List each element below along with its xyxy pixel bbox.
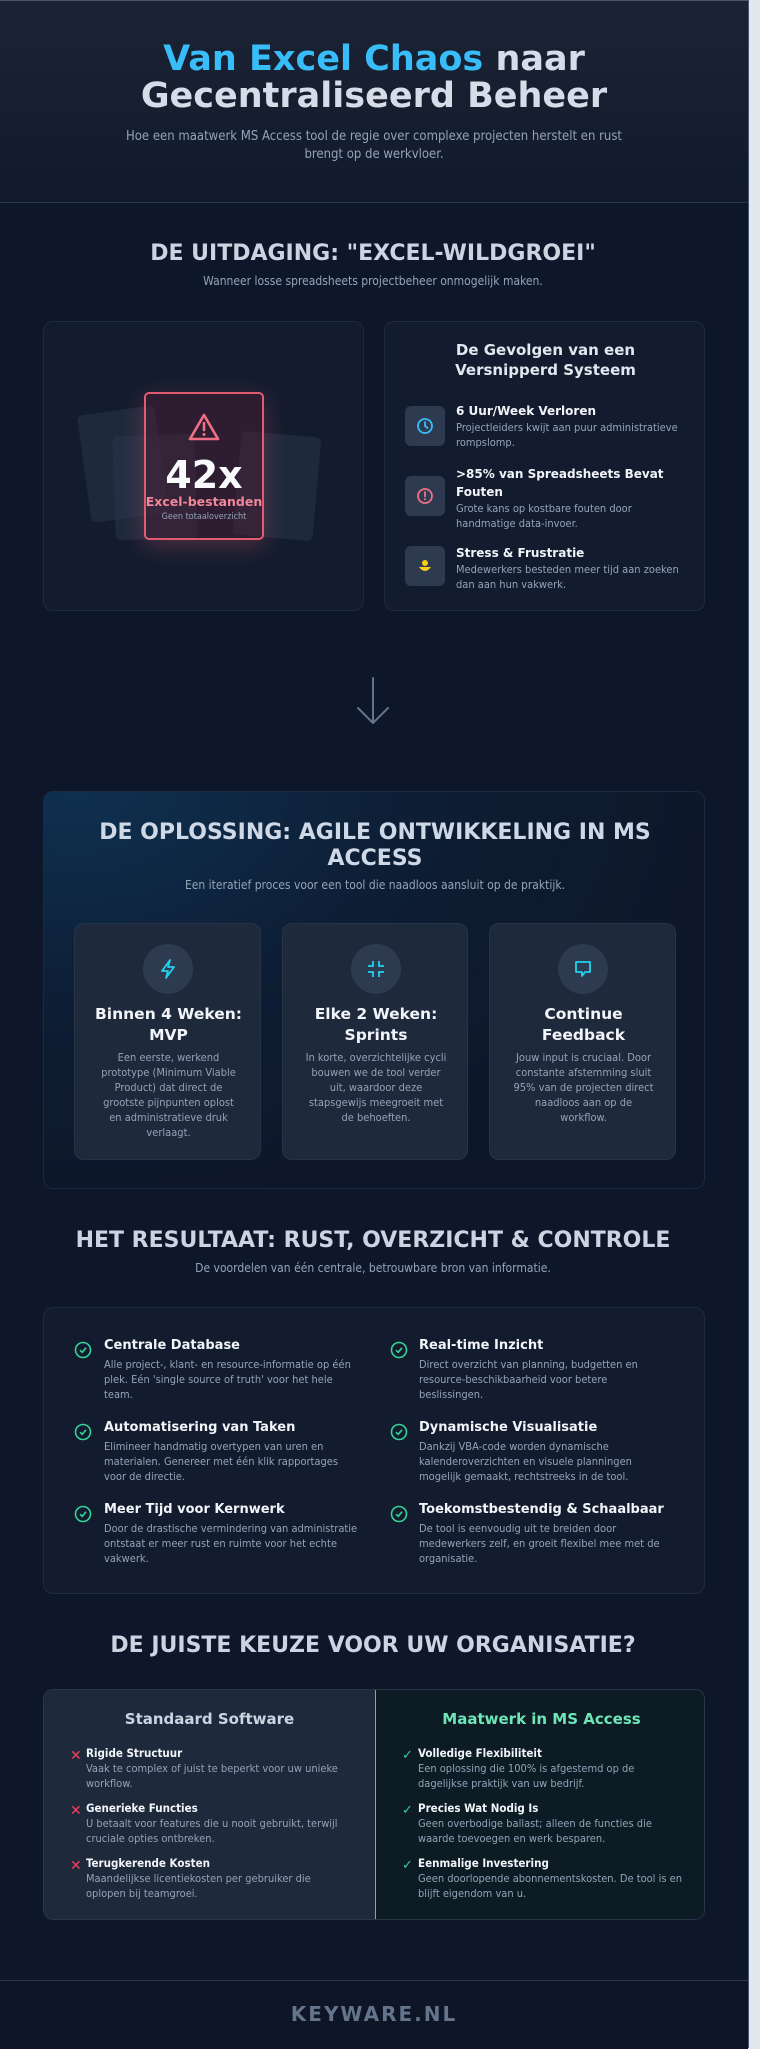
benefit: centrale database: Centrale Database xyxy=(104,1338,240,1353)
column: maatwerk xyxy=(375,1690,706,1921)
red alert box: Geen totaaloverzicht xyxy=(162,512,246,522)
heading: de uitdaging: DE UITDAGING: "EXCEL-WILDGROEI" xyxy=(150,241,596,266)
column: maatwerk: ✓ xyxy=(402,1748,413,1763)
column: maatwerk: Geen overbodige ballast; alleen de functies die waarde toevoegen en werk besparen. xyxy=(418,1817,652,1845)
benefit: meer tijd xyxy=(74,1502,357,1565)
item: stress: Medewerkers besteden meer tijd aan zoeken dan aan hun vakwerk. xyxy=(456,563,679,591)
column: standaard software: Rigide Structuur xyxy=(86,1746,182,1760)
item: fouten xyxy=(405,467,664,530)
column: maatwerk: ✓ xyxy=(402,1803,413,1818)
column: standaard software: ✕ xyxy=(70,1748,82,1764)
item: uren verloren: Projectleiders kwijt aan puur administratieve rompslomp. xyxy=(456,421,678,449)
subheading: oplossing: Een iteratief proces voor een tool die naadloos aansluit op de praktijk. xyxy=(185,878,565,892)
column: maatwerk: ✓ xyxy=(402,1858,413,1873)
pro: flexibiliteit xyxy=(402,1746,634,1790)
stat number: 42x xyxy=(165,453,243,497)
benefit: meer tijd: Door de drastische vermindering van administratie ontstaat er meer rust en ruimte voor het echte vakwerk. xyxy=(104,1522,357,1565)
footer xyxy=(0,1980,748,2049)
benefit: visualisatie xyxy=(390,1420,632,1483)
icon: chat xyxy=(558,944,608,994)
subheading: resultaat: De voordelen van één centrale, betrouwbare bron van informatie. xyxy=(195,1261,551,1275)
benefit: automatisering xyxy=(74,1420,338,1483)
ghost spreadsheets xyxy=(78,406,321,541)
icon: alert circle xyxy=(405,476,445,516)
column: maatwerk: Precies Wat Nodig Is xyxy=(418,1801,538,1815)
item: uren verloren xyxy=(405,404,678,449)
icon: sprint arrows xyxy=(351,944,401,994)
subheading: uitdaging: Wanneer losse spreadsheets projectbeheer onmogelijk maken. xyxy=(203,274,543,288)
column: maatwerk: Volledige Flexibiliteit xyxy=(418,1746,542,1760)
benefit: centrale database: Alle project-, klant- en resource-informatie op één plek. Eén 'single source of truth' voor het hele team. xyxy=(104,1358,351,1401)
column: maatwerk: Geen doorlopende abonnementskosten. De tool is en blijft eigendom van u. xyxy=(418,1872,682,1900)
card: mvp: Een eerste, werkend prototype (Minimum Viable Product) dat direct de grootste pijnpunten oplost en administratieve druk verlaagt. xyxy=(101,1051,236,1139)
card: sprints xyxy=(282,923,468,1160)
benefit: meer tijd: Meer Tijd voor Kernwerk xyxy=(104,1502,285,1517)
icon: stress xyxy=(405,546,445,586)
column: standaard software: U betaalt voor features die u nooit gebruikt, terwijl cruciale opties ontbreken. xyxy=(86,1817,338,1845)
arrow: down xyxy=(357,677,389,724)
column: standaard software: Generieke Functies xyxy=(86,1801,198,1815)
item: fouten: >85% van Spreadsheets Bevat Fouten xyxy=(456,467,664,499)
header xyxy=(0,1,748,203)
pro: precies xyxy=(402,1801,652,1845)
column: standaard software: ✕ xyxy=(70,1803,82,1819)
column: maatwerk: Eenmalige Investering xyxy=(418,1856,549,1870)
card: mvp: Binnen 4 Weken: xyxy=(95,1005,242,1023)
heading: oplossing: ACCESS xyxy=(327,846,423,871)
red alert box xyxy=(144,392,264,540)
column: standaard software: Standaard Software xyxy=(125,1710,294,1728)
column: maatwerk: Maatwerk in MS Access xyxy=(442,1710,641,1728)
icon: warning triangle xyxy=(188,414,220,440)
footer brand: KEYWARE.NL xyxy=(291,2002,457,2026)
card: feedback: Jouw input is cruciaal. Door constante afstemming sluit 95% van de projecten direct naadloos aan op de workflow. xyxy=(513,1051,654,1124)
benefit: real-time inzicht: Direct overzicht van planning, budgetten en resource-beschikbaarheid voor betere beslissingen. xyxy=(419,1358,638,1401)
title xyxy=(141,39,608,116)
benefit: toekomstbestendig: Toekomstbestendig & Schaalbaar xyxy=(419,1502,664,1517)
item: stress: Stress & Frustratie xyxy=(456,546,584,560)
heading: gevolgen xyxy=(455,341,636,379)
card: feedback: Feedback xyxy=(542,1026,625,1044)
column: standaard software: Maandelijkse licentiekosten per gebruiker die oplopen bij teamgroei. xyxy=(86,1872,311,1900)
heading: gevolgen: De Gevolgen van een xyxy=(456,341,635,359)
item: stress xyxy=(405,546,679,591)
benefit: toekomstbestendig xyxy=(390,1502,664,1565)
column: maatwerk: Een oplossing die 100% is afgestemd op de dagelijkse praktijk van uw bedrijf. xyxy=(418,1762,634,1790)
icon: lightning xyxy=(143,944,193,994)
benefit: visualisatie: Dynamische Visualisatie xyxy=(419,1420,597,1435)
panel: voordelen xyxy=(43,1307,705,1594)
benefit: automatisering: Automatisering van Taken xyxy=(104,1420,295,1435)
card: sprints: Sprints xyxy=(345,1026,407,1044)
icon: clock xyxy=(405,406,445,446)
benefit: centrale database xyxy=(74,1338,351,1401)
pro: investering xyxy=(402,1856,682,1900)
title: Gecentraliseerd Beheer xyxy=(141,76,607,116)
card: mvp xyxy=(74,923,261,1160)
subtitle: Hoe een maatwerk MS Access tool de regie over complexe projecten herstelt en rust brengt op de werkvloer. xyxy=(126,129,622,162)
item: fouten: Grote kans op kostbare fouten door handmatige data-invoer. xyxy=(456,502,632,530)
column: standaard software xyxy=(44,1690,375,1921)
benefit: visualisatie: Dankzij VBA-code worden dynamische kalenderoverzichten en visuele planningen mogelijk gemaakt, rechtstreeks in de tool. xyxy=(419,1440,632,1483)
stat label: Excel-bestanden xyxy=(146,494,262,509)
benefit: real-time inzicht: Real-time Inzicht xyxy=(419,1338,543,1353)
item: uren verloren: 6 Uur/Week Verloren xyxy=(456,404,596,418)
con: kosten xyxy=(70,1856,311,1900)
card: feedback xyxy=(489,923,676,1160)
panel: de oplossing xyxy=(43,791,705,1189)
panel: gevolgen xyxy=(384,321,705,611)
title: Van Excel Chaos naar xyxy=(163,39,585,79)
panel: 42x excel files xyxy=(43,321,364,611)
benefit: toekomstbestendig: De tool is eenvoudig uit te breiden door medewerkers zelf, en groeit flexibel mee met de organisatie. xyxy=(419,1522,660,1565)
heading: resultaat: HET RESULTAAT: RUST, OVERZICHT & CONTROLE xyxy=(76,1228,670,1253)
panel: vergelijking xyxy=(43,1689,705,1920)
card: feedback: Continue xyxy=(544,1005,623,1023)
benefit: real-time inzicht xyxy=(390,1338,638,1401)
column: standaard software: Terugkerende Kosten xyxy=(86,1856,210,1870)
card: sprints: Elke 2 Weken: xyxy=(315,1005,437,1023)
column: standaard software: Vaak te complex of juist te beperkt voor uw unieke workflow. xyxy=(86,1762,338,1790)
heading: oplossing xyxy=(99,820,651,871)
heading: gevolgen: Versnipperd Systeem xyxy=(455,361,636,379)
con: generiek xyxy=(70,1801,338,1845)
con: rigide xyxy=(70,1746,338,1790)
card: mvp: MVP xyxy=(149,1026,188,1044)
heading: juiste keuze: DE JUISTE KEUZE VOOR UW ORGANISATIE? xyxy=(110,1633,636,1658)
column: standaard software: ✕ xyxy=(70,1858,82,1874)
card: sprints: In korte, overzichtelijke cycli bouwen we de tool verder uit, waardoor deze stapsgewijs meegroeit met de behoeften. xyxy=(306,1051,446,1124)
benefit: automatisering: Elimineer handmatig overtypen van uren en materialen. Genereer met één klik rapportages voor de directie. xyxy=(104,1440,338,1483)
heading: oplossing: DE OPLOSSING: AGILE ONTWIKKELING IN MS xyxy=(99,820,651,845)
